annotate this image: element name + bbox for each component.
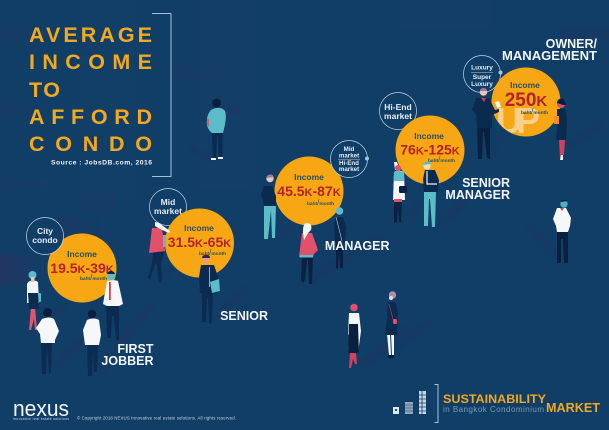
income circle: first jobber: baht/month xyxy=(80,273,107,282)
income circle: owner: Income xyxy=(510,80,540,90)
figure: man with white shirt 2 xyxy=(83,310,101,376)
shadows xyxy=(36,303,153,372)
badge: hi-end market: Hi-End xyxy=(384,102,412,112)
figure: woman with teal hair xyxy=(27,271,41,330)
title xyxy=(29,23,152,156)
badge: luxury / super luxury: Luxury xyxy=(471,64,493,72)
income circle: senior manager: Income xyxy=(414,131,444,141)
label: first jobber xyxy=(101,342,154,368)
income circle: senior manager: 76K-125K xyxy=(400,142,460,158)
panel: senior manager xyxy=(380,92,510,227)
figure: person in turquoise jacket xyxy=(190,98,226,160)
sustainability market logo xyxy=(393,384,600,422)
source note: Source : JobsDB.com, 2016 xyxy=(51,160,152,166)
badge: city condo: condo xyxy=(32,235,58,245)
panel: first jobber xyxy=(26,218,154,376)
figure: manager man xyxy=(261,174,276,239)
income circle: first jobber xyxy=(48,234,116,302)
label: owner / management: MANAGEMENT xyxy=(502,49,597,63)
logo text: SUSTAINABILITY xyxy=(443,392,546,406)
income circle: senior manager: baht/month xyxy=(428,155,455,164)
figure: woman with black bag xyxy=(393,162,407,223)
figure: woman in red top xyxy=(148,222,170,283)
income circle: senior: 31.5K-65K xyxy=(168,234,231,250)
label: senior manager: SENIOR xyxy=(462,176,510,190)
title: TO xyxy=(29,78,60,102)
income circle: first jobber: Income xyxy=(67,249,97,259)
badge: mid market: Mid xyxy=(161,197,175,207)
panel: senior xyxy=(148,188,268,324)
badge: luxury / super luxury: Super xyxy=(473,74,492,81)
label: owner / management: OWNER/ xyxy=(546,37,598,51)
title: AFFORD xyxy=(29,105,152,129)
title bracket xyxy=(152,14,171,176)
label: manager: MANAGER xyxy=(325,239,390,253)
badge: mid market / hi-end market: market xyxy=(339,152,359,160)
income circle: owner: 250K xyxy=(505,90,547,111)
bracket xyxy=(434,384,438,422)
figure: woman with teal hair and dark coat xyxy=(334,207,346,269)
income circle: senior xyxy=(165,208,234,278)
label: owner / management xyxy=(502,37,598,63)
figure: woman with red hair and skirt xyxy=(348,304,410,368)
label: first jobber: FIRST xyxy=(117,342,154,356)
copyright: © Copyright 2018 NEXUS Innovative real estate solutions. All rights reserved. xyxy=(77,416,236,420)
income circle: manager: Income xyxy=(294,172,324,182)
title: CONDO xyxy=(29,132,152,156)
label: first jobber: JOBBER xyxy=(101,354,154,368)
figure: senior manager man xyxy=(423,161,439,227)
income circle: owner xyxy=(492,68,560,141)
figure: owner man in suit xyxy=(472,88,501,159)
title: INCOME xyxy=(29,50,152,74)
label: senior manager xyxy=(445,176,510,202)
badge: luxury / super luxury: Luxury xyxy=(471,81,493,88)
badge: hi-end market: market xyxy=(384,111,412,121)
badge: mid market / hi-end market: Mid xyxy=(344,146,355,153)
badge: mid market / hi-end market xyxy=(330,140,369,178)
logo text xyxy=(443,392,600,415)
income circle: manager: baht/month xyxy=(307,198,334,207)
label: senior: SENIOR xyxy=(220,309,268,323)
logo: nexus: nexus xyxy=(13,396,69,421)
income circle: senior manager xyxy=(396,116,464,184)
label: senior manager: MANAGER xyxy=(445,188,510,202)
figure: owner woman in dark dress xyxy=(554,99,567,160)
figure: woman in coral jacket xyxy=(299,223,318,284)
figure: man with white shirt 1 xyxy=(36,308,59,374)
badge: mid market: market xyxy=(154,206,182,216)
badge: city condo xyxy=(26,218,64,254)
watermark: UP: UP xyxy=(496,100,540,141)
figure: man with white coat at right xyxy=(525,200,571,263)
panel: manager xyxy=(261,140,390,284)
logo: nexus: innovative real estate solutions xyxy=(13,417,69,421)
logo text: in Bangkok Condominium xyxy=(443,405,544,414)
badge: luxury / super luxury xyxy=(464,56,502,92)
badge: hi-end market xyxy=(380,92,416,130)
title: AVERAGE xyxy=(29,23,152,47)
badge: mid market / hi-end market: market xyxy=(339,166,359,173)
income circle: manager xyxy=(274,156,344,226)
income circle: senior: Income xyxy=(184,223,214,233)
income circle: manager: 45.5K-87K xyxy=(277,183,341,199)
figure: senior man with bag xyxy=(199,255,220,324)
badge: mid market xyxy=(150,188,186,226)
income circle: first jobber: 19.5K-39K xyxy=(50,260,114,276)
income circle: senior: baht/month xyxy=(199,248,226,257)
panel: owner / management xyxy=(464,37,600,160)
icon: buildings xyxy=(393,391,426,414)
figure: man with red tie xyxy=(103,271,123,340)
badge: mid market / hi-end market: Hi-End xyxy=(339,160,359,167)
figure: woman with mauve hair xyxy=(385,291,430,358)
logo text: MARKET xyxy=(546,401,600,415)
badge: city condo: City xyxy=(37,226,53,236)
income circle: owner: baht/month xyxy=(521,107,548,116)
